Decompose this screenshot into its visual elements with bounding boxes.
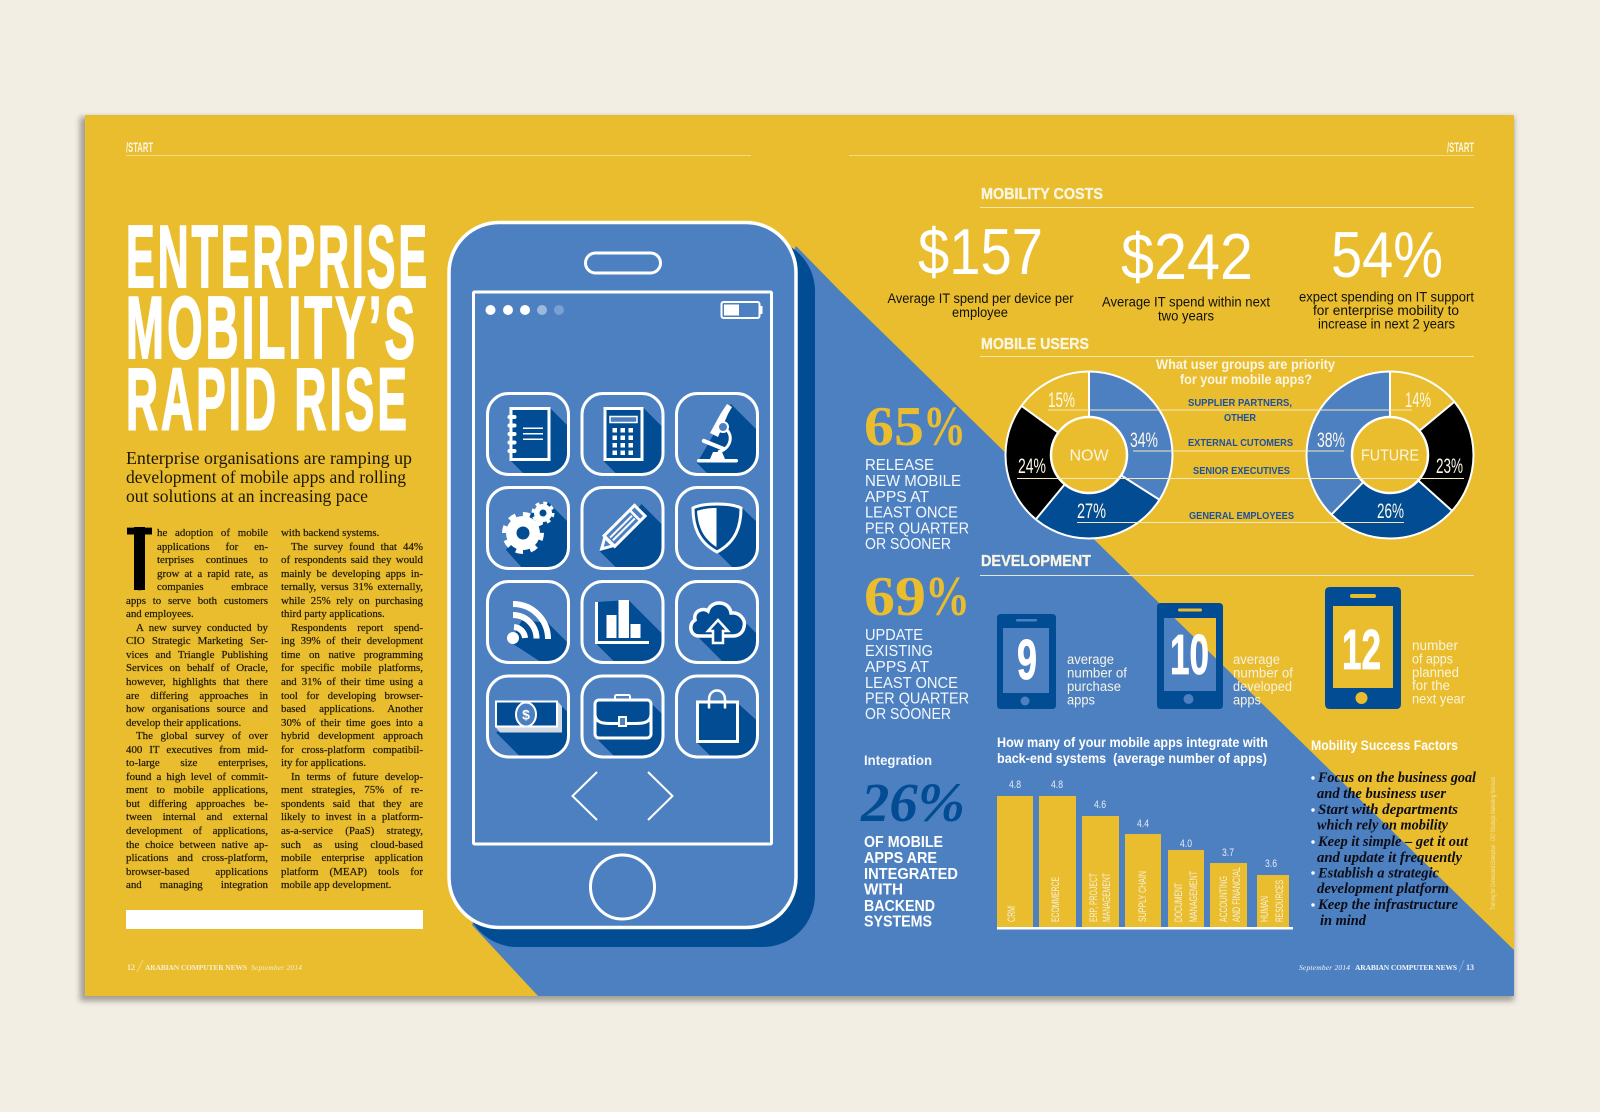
stat: 65% xyxy=(864,396,969,553)
success factors list: Keep the infrastructure xyxy=(1317,897,1459,913)
body text column 1: but differing approaches be- xyxy=(126,798,268,810)
success factors list: in mind xyxy=(1320,913,1367,929)
body text column 1 xyxy=(126,527,268,891)
heading: mobile users: MOBILE USERS xyxy=(981,336,1089,353)
body text column 1: terprises continues to xyxy=(157,554,268,566)
bar category labels: HUMAN xyxy=(1259,896,1271,922)
magazine spread page xyxy=(80,115,1514,1001)
body text column 1: however, highlights that there xyxy=(126,676,268,688)
body text column 2: In terms of future develop- xyxy=(291,771,423,783)
body text column 2: The survey found that 44% xyxy=(291,541,423,553)
bar values: 4.0 xyxy=(1180,838,1192,850)
header right: /START xyxy=(1447,139,1474,155)
body text column 1: grow at a rapid rate, as xyxy=(157,568,268,580)
stat: $157: $157 xyxy=(918,215,1043,288)
footer right: September 2014 xyxy=(1299,963,1350,972)
list bullets xyxy=(1311,776,1315,907)
bars xyxy=(997,796,1289,927)
stat: integration 26%: APPS ARE xyxy=(864,850,937,867)
donut percent labels xyxy=(1018,389,1463,523)
footer left: 12 xyxy=(127,963,135,972)
chart title: How many of your mobile apps integrate with xyxy=(997,735,1268,750)
donut question xyxy=(1156,357,1335,387)
body text column 2: with backend systems. xyxy=(281,527,379,539)
phone stat: 9: 9 xyxy=(1017,628,1037,692)
success factors list xyxy=(1317,770,1476,929)
phone stat: 12: planned xyxy=(1412,665,1459,680)
text: T xyxy=(126,509,153,610)
stat: $242 xyxy=(1102,220,1270,324)
success factors list: Keep it simple – get it out xyxy=(1317,834,1469,850)
body text column 2: time on native programming xyxy=(281,649,423,661)
icon: microscope xyxy=(676,394,759,476)
bar category labels: MANAGEMENT xyxy=(1101,873,1113,922)
body text column 2: based applications. Another xyxy=(281,703,423,715)
stat: 69%: UPDATE xyxy=(865,627,923,644)
icon: briefcase xyxy=(582,676,664,758)
stat: $157: Average IT spend per device per xyxy=(888,291,1074,306)
chart title xyxy=(997,735,1268,766)
body text column 1: ment to mobile applications, xyxy=(126,784,268,796)
stat: $157 xyxy=(888,215,1074,320)
screen xyxy=(474,292,772,844)
phone illustration xyxy=(449,222,815,947)
phone stat: 9: number of xyxy=(1067,666,1127,680)
bar category labels: RESOURCES xyxy=(1274,880,1286,922)
success factors list: and update it frequently xyxy=(1317,850,1463,866)
title: RAPID RISE xyxy=(126,350,410,448)
body text column 2: ternally, versus 31% externally, xyxy=(281,581,423,593)
stat: 54%: increase in next 2 years xyxy=(1318,316,1455,332)
panel: mobility success factors xyxy=(1311,738,1476,929)
body text column 2: as-a-service (PaaS) strategy, xyxy=(281,825,423,837)
subheading xyxy=(126,448,412,506)
body text column 1: browser-based applications xyxy=(126,866,268,878)
success factors list: Start with departments xyxy=(1318,802,1458,818)
bar values: 4.8 xyxy=(1009,779,1021,791)
donut legend labels: EXTERNAL CUTOMERS xyxy=(1188,437,1293,449)
text: ENTERPRISE xyxy=(126,207,430,306)
phone stat: 10: apps xyxy=(1233,692,1261,708)
body text column 2: ment strategies, 75% of re- xyxy=(281,784,423,796)
stat: 54%: for enterprise mobility to xyxy=(1313,303,1459,318)
phone shadow xyxy=(465,239,815,947)
stat: 69%: APPS AT xyxy=(865,659,929,676)
stat: integration 26%: 26% xyxy=(860,772,965,833)
donut percent labels: 34% xyxy=(1130,429,1158,452)
body text column 1: develop their applications. xyxy=(126,717,241,729)
stat: 69%: OR SOONER xyxy=(865,706,951,723)
arrow: next xyxy=(648,772,672,820)
donut legend labels: OTHER xyxy=(1224,412,1256,424)
donut percent labels: 24% xyxy=(1018,455,1046,478)
stat: 69% xyxy=(864,566,970,723)
bar category labels: ECOMMERCE xyxy=(1050,877,1062,922)
stat: 65%: NEW MOBILE xyxy=(865,473,961,490)
donut legend labels: SUPPLIER PARTNERS, xyxy=(1188,397,1292,409)
body text column 2: for cross-platform compatibil- xyxy=(281,744,423,756)
icon: rss xyxy=(488,582,570,664)
stat: integration 26%: Integration xyxy=(864,753,932,768)
body text column 1: apps to serve both customers xyxy=(126,595,268,607)
phone stat: 12: next year xyxy=(1412,692,1465,706)
body text column 1: plications and cross-platform, xyxy=(126,852,268,864)
stat: 54%: 54% xyxy=(1331,218,1443,291)
phone stat: 10: developed xyxy=(1233,679,1292,694)
header left: /START xyxy=(126,139,153,155)
body text column 1: companies embrace xyxy=(157,581,268,593)
title: MOBILITY’S xyxy=(126,278,418,377)
footer right xyxy=(1299,960,1474,972)
bar category labels: ACCOUNTING xyxy=(1218,876,1230,922)
success factors list: development platform xyxy=(1317,881,1449,897)
stat: 65%: APPS AT xyxy=(865,489,929,506)
stat: $157: employee xyxy=(952,305,1008,320)
body text column 2: 30% of their time goes into a xyxy=(281,717,423,729)
body text column 2: and 31% of their time using a xyxy=(281,676,423,688)
donut percent labels: 15% xyxy=(1048,389,1075,412)
body text column 1: are differing approaches in xyxy=(126,690,268,702)
stat: 69%: EXISTING xyxy=(865,643,933,660)
stat: 69%: LEAST ONCE xyxy=(865,675,958,692)
connector lines xyxy=(1017,410,1464,522)
battery xyxy=(722,302,762,318)
bar category labels: SUPPLY CHAIN xyxy=(1137,871,1149,922)
stat: 54% xyxy=(1299,218,1474,332)
bar values: 4.4 xyxy=(1137,818,1149,830)
body text column 2: ing 39% of their development xyxy=(281,635,423,647)
icon: banknotes: $ xyxy=(522,706,530,722)
body text column 2: likely to invest in a platform- xyxy=(281,811,423,823)
body text column 1: 400 IT executives from mid- xyxy=(126,744,268,756)
bar category labels: MANAGEMENT xyxy=(1188,871,1200,922)
body text column 1: A new survey conducted by xyxy=(136,622,268,634)
body text column 1: The global survey of over xyxy=(136,730,268,742)
chart axis xyxy=(997,927,1293,930)
arrow: previous xyxy=(572,772,597,820)
phone stat: 12: 12 xyxy=(1342,618,1381,682)
bar values: 4.8 xyxy=(1051,779,1063,791)
stat: 69%: 69 xyxy=(864,566,926,628)
body text column 2: mainly be developing apps in- xyxy=(281,568,423,580)
bar values: 4.6 xyxy=(1094,799,1106,811)
phone stat: 12: of apps xyxy=(1412,652,1453,666)
body text column 2: Respondents report spend- xyxy=(291,622,423,634)
subheading: development of mobile apps and rolling xyxy=(126,467,406,487)
icon: shield xyxy=(676,488,759,570)
body text column 2: such as using cloud-based xyxy=(281,839,423,851)
phone stat: 10: number of xyxy=(1233,666,1293,680)
body text column 1: found a high level of commit- xyxy=(126,771,268,783)
icon: shopping bag xyxy=(676,676,759,758)
body text column 2: ity for applications. xyxy=(281,757,366,769)
stat: 54%: expect spending on IT support xyxy=(1299,290,1474,304)
body text column 2: mobile enterprise application xyxy=(281,852,423,864)
bar values xyxy=(1009,779,1277,870)
footer left: September 2014 xyxy=(251,963,302,972)
icon: cloud upload xyxy=(676,582,759,664)
phone stat: 10 xyxy=(1157,603,1293,709)
body text column 1: and managing integration xyxy=(126,879,268,891)
donut percent labels: 14% xyxy=(1405,389,1431,412)
title xyxy=(126,207,430,448)
footer left xyxy=(127,960,302,972)
phone stat: 12: number xyxy=(1412,638,1458,653)
blue diagonal band xyxy=(472,246,1514,996)
donut legend labels xyxy=(1188,397,1294,522)
body text column 2: third party applications. xyxy=(281,608,385,620)
stat: 65%: 65 xyxy=(864,396,924,458)
body text column 1: development of applications, xyxy=(126,825,268,837)
body text column 2: mobile app development. xyxy=(281,879,391,891)
phone stat: 9: apps xyxy=(1067,692,1095,708)
chart title: back-end systems (average number of apps) xyxy=(997,751,1267,766)
heading: mobility costs: MOBILITY COSTS xyxy=(981,186,1103,203)
phone stat: 12 xyxy=(1325,587,1465,709)
stat: integration 26%: SYSTEMS xyxy=(864,914,932,930)
body text column 2: hybrid development approach xyxy=(281,730,423,742)
bar category labels: DOCUMENT xyxy=(1173,883,1185,922)
phone body xyxy=(449,222,796,928)
bar category labels: ERP, PROJECT xyxy=(1088,873,1100,922)
donut legend labels: SENIOR EXECUTIVES xyxy=(1193,465,1290,477)
phone stat: 9: average xyxy=(1067,652,1114,667)
body text column 2: spondents said that they are xyxy=(281,798,423,810)
success factors heading: Mobility Success Factors xyxy=(1311,738,1458,753)
subheading: out solutions at an increasing pace xyxy=(126,486,368,506)
stat: 65%: % xyxy=(923,396,966,458)
donut percent labels: 27% xyxy=(1077,500,1106,523)
success factors list: Focus on the business goal xyxy=(1317,770,1476,786)
icon: banknotes xyxy=(488,676,570,758)
body text column 1: tween internal and external xyxy=(126,811,268,823)
stat: integration 26%: INTEGRATED xyxy=(864,866,958,883)
stat: 65%: LEAST ONCE xyxy=(865,504,958,522)
icon: gears xyxy=(488,488,570,570)
body text column 2: while 25% rely on purchasing xyxy=(281,595,423,607)
stat: $242: Average IT spend within next xyxy=(1102,294,1270,310)
icon: notebook xyxy=(488,394,570,476)
phone stat: 9 xyxy=(997,614,1127,709)
donut: future xyxy=(1306,372,1474,538)
donut: future: FUTURE xyxy=(1361,448,1419,464)
panel: development xyxy=(980,553,1474,709)
stat: 69%: % xyxy=(925,566,970,628)
body text column 2 xyxy=(280,527,424,891)
donut: now xyxy=(1006,372,1172,538)
phone stat: 12: for the xyxy=(1412,678,1450,693)
icon: pencil xyxy=(582,488,664,570)
stat: integration 26%: OF MOBILE xyxy=(864,834,943,851)
signal dots xyxy=(486,305,564,315)
stat: $242: $242 xyxy=(1121,220,1253,293)
success factors list: which rely on mobility xyxy=(1317,818,1449,834)
icon: calculator xyxy=(582,394,664,476)
speaker xyxy=(586,253,660,273)
body text column 1: how organisations source and xyxy=(126,703,268,715)
stat: 65%: RELEASE xyxy=(865,457,934,474)
home button xyxy=(590,855,654,919)
donut percent labels: 26% xyxy=(1377,500,1404,523)
stat: 65%: OR SOONER xyxy=(865,536,951,553)
stat: integration 26% xyxy=(860,753,965,930)
heading: development: DEVELOPMENT xyxy=(981,553,1091,570)
bar values: 3.7 xyxy=(1222,847,1234,859)
body text column 1: vices and Triangle Publishing xyxy=(126,649,268,661)
body text column 1: applications for en- xyxy=(157,541,268,553)
stat: integration 26%: WITH xyxy=(864,882,903,898)
vertical credit line: Training for Connected Enterprise · CIO Strategic Marketing Services xyxy=(1490,777,1497,910)
white ad bar xyxy=(126,910,423,929)
bar values: 3.6 xyxy=(1265,858,1277,870)
icon: bar chart xyxy=(582,582,664,664)
donut question: for your mobile apps? xyxy=(1180,372,1312,387)
success factors list: and the business user xyxy=(1317,786,1446,802)
donut percent labels: 38% xyxy=(1317,429,1345,452)
phone stat: 9: purchase xyxy=(1067,679,1121,694)
donut legend labels: GENERAL EMPLOYEES xyxy=(1189,510,1294,522)
donut: now: NOW xyxy=(1069,448,1109,464)
body text column 2: tool for developing browser- xyxy=(281,690,423,702)
body text column 2: for specific mobile platforms, xyxy=(281,662,423,674)
bar category labels: AND FINANCIAL xyxy=(1231,867,1243,922)
bar category labels: CRM xyxy=(1006,906,1018,922)
stat: 69%: PER QUARTER xyxy=(865,690,969,708)
body text column 1: to-large size enterprises, xyxy=(126,757,268,769)
footer right: 13 xyxy=(1466,963,1474,972)
subheading: Enterprise organisations are ramping up xyxy=(126,448,412,468)
bar category labels xyxy=(1006,867,1286,922)
panel: mobile users xyxy=(980,336,1474,538)
body text column 2: of respondents said they would xyxy=(281,554,423,566)
body text column 1: Services on behalf of Oracle, xyxy=(126,662,268,674)
footer left: ARABIAN COMPUTER NEWS xyxy=(145,963,247,972)
body text column 1: the choice between native ap- xyxy=(126,839,268,851)
footer right: ARABIAN COMPUTER NEWS xyxy=(1355,963,1457,972)
body text column 1: and employees. xyxy=(126,608,194,620)
phone stat: 10: 10 xyxy=(1170,623,1209,687)
panel: back-end integration bar chart xyxy=(997,735,1293,930)
body text column 1: he adoption of mobile xyxy=(157,527,268,539)
drop cap xyxy=(126,509,153,610)
donut question: What user groups are priority xyxy=(1156,357,1335,372)
success factors list: Establish a strategic xyxy=(1317,866,1440,882)
stat: integration 26%: BACKEND xyxy=(864,898,935,915)
stat: 65%: PER QUARTER xyxy=(865,520,969,538)
panel: mobility costs xyxy=(888,186,1474,332)
stat: $242: two years xyxy=(1158,308,1214,324)
body text column 1: CIO Strategic Marketing Ser- xyxy=(126,635,268,647)
phone stat: 10: average xyxy=(1233,652,1280,667)
body text column 2: platform (MEAP) tools for xyxy=(281,866,423,878)
donut percent labels: 23% xyxy=(1436,455,1463,478)
